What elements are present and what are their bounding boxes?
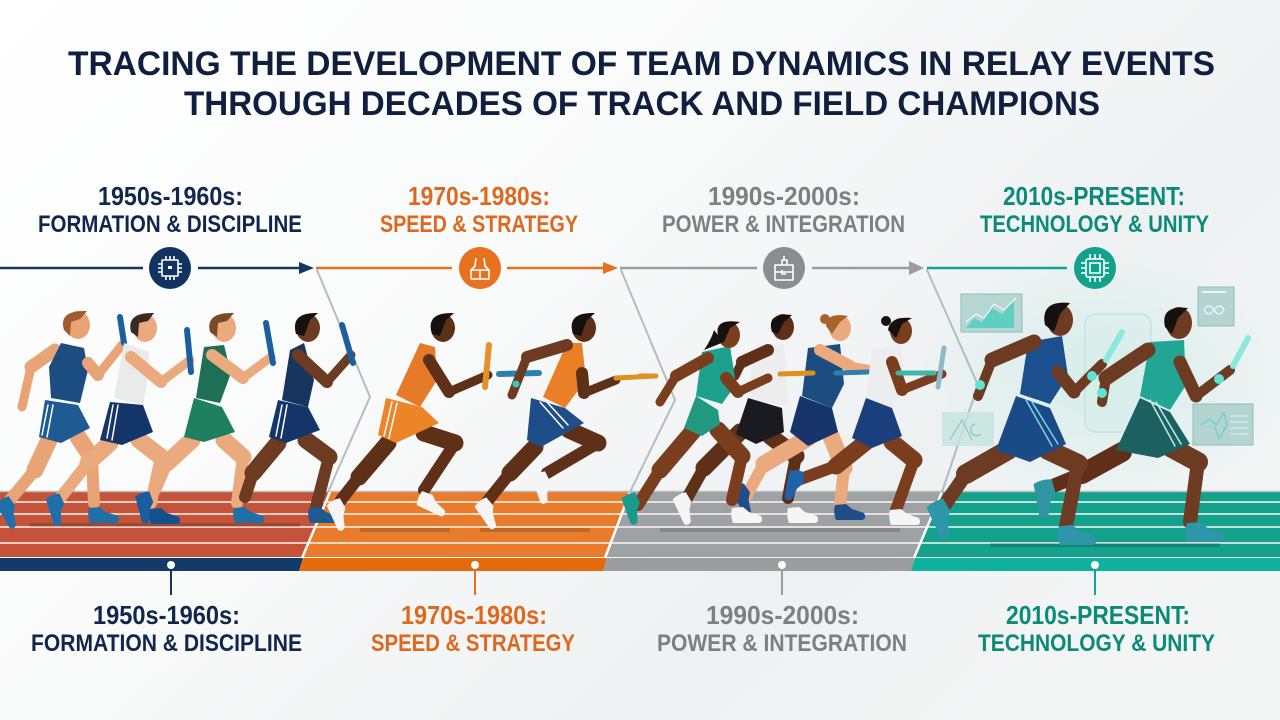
label: 1950s-1960s: 1950s-1960s: <box>93 600 240 630</box>
runner 8 <box>672 314 818 526</box>
title: TRACING THE DEVELOPMENT OF TEAM DYNAMICS IN RELAY EVENTS <box>68 45 1215 83</box>
connector: era 4 <box>1091 561 1099 595</box>
heading: 1970s-1980s <box>380 181 578 238</box>
label: 2010s-present <box>978 600 1215 657</box>
label: 1990s-2000s: 1990s-2000s: <box>706 600 859 630</box>
heading: 1950s-1960s: 1950s-1960s: <box>98 181 243 211</box>
chevron dividers <box>317 270 978 492</box>
runner 5 <box>326 313 489 532</box>
label: 1990s-2000s <box>657 600 907 657</box>
heading: 1990s-2000s <box>662 181 905 238</box>
label: 1990s-2000s: POWER & INTEGRATION <box>657 630 907 657</box>
runner 10 <box>784 316 944 525</box>
heading: 1950s-1960s: FORMATION & DISCIPLINE <box>38 211 302 238</box>
icon: chip teal <box>1074 247 1116 289</box>
panel: device outline hologram <box>1085 314 1151 432</box>
icon: chip navy <box>149 247 191 289</box>
label: 1950s-1960s <box>31 600 302 657</box>
heading: 1990s-2000s: POWER & INTEGRATION <box>662 211 905 238</box>
timeline line: era 4 <box>927 267 1067 269</box>
heading: 2010s-present: TECHNOLOGY & UNITY <box>980 211 1209 238</box>
icon: baton bag orange <box>459 247 501 289</box>
heading: 1970s-1980s: 1970s-1980s: <box>408 181 550 211</box>
heading: 2010s-present: 2010s-PRESENT: <box>1003 181 1185 211</box>
heading: 1970s-1980s: SPEED & STRATEGY <box>380 211 578 238</box>
title <box>68 45 1215 123</box>
timeline arrow: era 3 <box>620 261 924 275</box>
heading: 2010s-present <box>980 181 1209 238</box>
panel: track era 2 <box>299 492 630 571</box>
icon: toolbox grey <box>763 247 805 289</box>
runner 9 <box>730 314 872 520</box>
panel: track era 3 <box>603 492 942 571</box>
timeline arrow: era 2 <box>316 262 618 274</box>
connector: era 3 <box>778 561 786 595</box>
heading: 1990s-2000s: 1990s-2000s: <box>708 181 860 211</box>
label: 1970s-1980s: 1970s-1980s: <box>401 600 547 630</box>
runner 1 <box>0 311 124 530</box>
label: 1950s-1960s: FORMATION & DISCIPLINE <box>31 630 302 657</box>
label: 2010s-present: TECHNOLOGY & UNITY <box>978 630 1215 657</box>
panel: track era 1 <box>0 492 330 571</box>
panel: growth chart hologram <box>961 294 1022 332</box>
connector: era 1 <box>167 561 175 595</box>
runner 7 <box>621 321 813 526</box>
runner 4 <box>245 313 353 523</box>
timeline arrow: era 1 <box>0 262 314 274</box>
panel: diagram hologram <box>1193 404 1253 445</box>
label: 1970s-1980s <box>371 600 575 657</box>
label: 1970s-1980s: SPEED & STRATEGY <box>371 630 575 657</box>
heading: 1950s-1960s <box>38 181 302 238</box>
title: THROUGH DECADES OF TRACK AND FIELD CHAMPIONS <box>184 85 1100 123</box>
runner 2 <box>45 313 191 527</box>
connector: era 2 <box>471 561 479 595</box>
runner 6 <box>474 313 655 531</box>
panel: sketch hologram <box>942 412 994 446</box>
label: 2010s-present: 2010s-PRESENT: <box>1006 600 1190 630</box>
runner 11 <box>926 303 1122 545</box>
panel: track era 4 <box>911 492 1280 571</box>
runner 3 <box>135 313 273 525</box>
runner 12 <box>1033 307 1248 542</box>
panel: infinity hologram <box>1198 287 1234 326</box>
